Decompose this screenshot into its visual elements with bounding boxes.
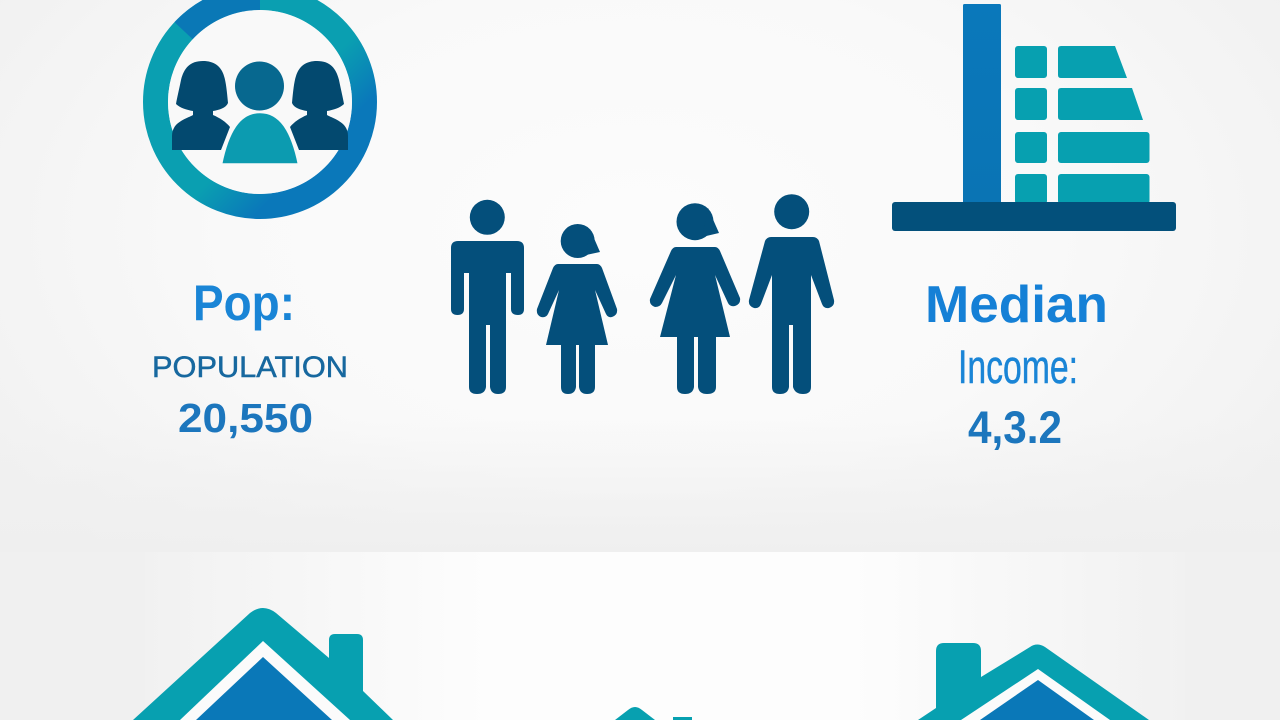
panel: housing [133, 608, 1149, 720]
panel: median income [892, 4, 1176, 453]
label: Income: Income: [958, 340, 1078, 393]
value: 4,3.2: 4,3.2 [968, 402, 1062, 453]
label: POPULATION: POPULATION [152, 351, 348, 384]
icon: house left [133, 608, 393, 720]
icon: man right [749, 194, 834, 394]
icon: woman [650, 203, 740, 394]
icon: people in ring [156, 0, 364, 206]
panel: family figures [451, 194, 834, 394]
icon: girl [537, 224, 617, 394]
label: Pop: Pop: [193, 275, 295, 331]
value: 20,550: 20,550 [178, 395, 313, 441]
label: Median: Median [925, 276, 1108, 334]
icon: house right [918, 643, 1149, 720]
panel: population [152, 0, 364, 441]
icon: house middle [615, 707, 692, 720]
icon: man left [451, 200, 524, 394]
icon: bar building [892, 4, 1176, 231]
